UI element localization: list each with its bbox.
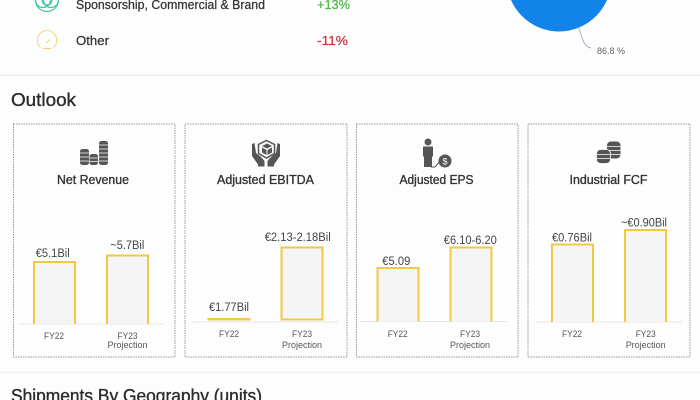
panel: Industrial FCF: Projection xyxy=(626,340,666,350)
pie label: 86.8 % xyxy=(597,46,625,56)
title: Adjusted EPS xyxy=(400,173,474,187)
panel: Net Revenue: FY23 xyxy=(118,331,138,341)
title: Net Revenue xyxy=(57,173,129,187)
panel: Net Revenue xyxy=(14,124,175,357)
axis labels: FY22 xyxy=(388,329,408,339)
values: €5.09 xyxy=(382,256,410,268)
panel: Net Revenue: Projection xyxy=(108,340,148,350)
icon: person with dollar: $ xyxy=(442,156,448,166)
pie leader line xyxy=(579,28,591,48)
panel: Adjusted EBITDA: FY23 xyxy=(292,329,312,339)
icon: coin stacks xyxy=(80,141,108,165)
axis labels: FY22 xyxy=(44,331,64,341)
icon: gauge xyxy=(37,31,57,48)
axis labels: FY22 xyxy=(219,329,239,339)
heading: Outlook: Outlook xyxy=(11,90,77,110)
icon: sponsorship rings xyxy=(36,0,58,12)
revenue row: Other: Other xyxy=(76,34,109,48)
panel: Adjusted EBITDA: €2.13-2.18Bil xyxy=(265,232,331,244)
revenue row: Other: -11% xyxy=(317,34,348,48)
values: €0.76Bil xyxy=(552,233,592,245)
icon: person with dollar xyxy=(423,138,452,168)
bar: FY23 xyxy=(450,248,492,322)
title: Industrial FCF xyxy=(570,173,648,187)
bar: FY22 xyxy=(378,268,418,322)
revenue row: Other xyxy=(37,31,348,48)
bar: FY23 xyxy=(625,230,666,322)
title: Adjusted EBITDA xyxy=(217,173,315,187)
bar: FY23 xyxy=(282,248,322,320)
bar: FY22 xyxy=(552,244,593,322)
icon: hands holding box xyxy=(252,140,280,166)
panel: Adjusted EPS: FY23 xyxy=(460,329,480,339)
values: €5.1Bil xyxy=(36,248,70,260)
values: €1.77Bil xyxy=(209,302,249,314)
panel: Adjusted EPS: €6.10-6.20 xyxy=(444,235,497,247)
revenue row: Sponsorship, Commercial & Brand xyxy=(36,0,350,12)
axis labels: FY22 xyxy=(562,329,582,339)
panel: Adjusted EBITDA xyxy=(185,124,347,357)
panel: Industrial FCF: ~€0.90Bil xyxy=(621,218,667,230)
bar: FY23 xyxy=(107,256,148,324)
panel: Net Revenue: ~5.7Bil xyxy=(110,240,144,252)
panel: Adjusted EPS xyxy=(356,124,518,357)
bar: FY22 xyxy=(208,318,250,320)
panel: Industrial FCF xyxy=(528,124,690,357)
panel: Industrial FCF: FY23 xyxy=(636,329,656,339)
panel: Adjusted EBITDA: Projection xyxy=(282,340,322,350)
bar: FY22 xyxy=(34,262,75,324)
pie chart xyxy=(507,0,625,56)
icon: coins xyxy=(596,142,620,164)
panel: Adjusted EPS: Projection xyxy=(450,340,490,350)
